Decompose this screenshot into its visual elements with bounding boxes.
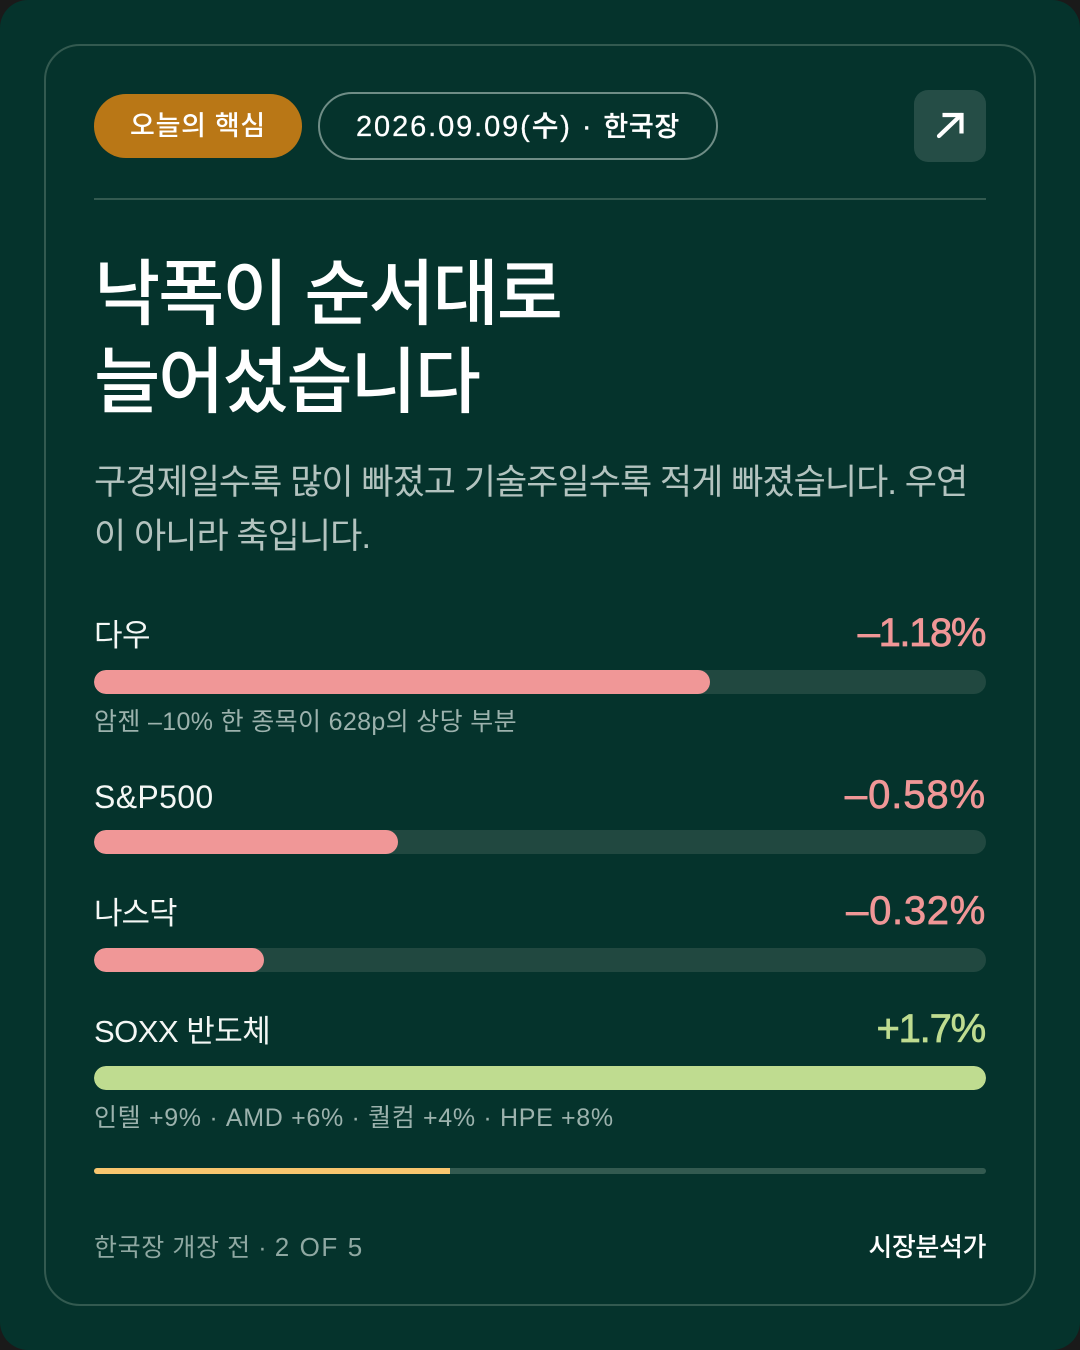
footer left text: 한국장 개장 전 · 2 OF 5 [94, 1232, 364, 1262]
row: Dow label: 다우 [94, 618, 150, 653]
title: 낙폭이 순서대로 [94, 255, 561, 335]
progress bar [94, 1168, 986, 1174]
date pill: 2026.09.09(수) · 한국장 [356, 111, 680, 143]
subtitle: 구경제일수록 많이 빠졌고 기술주일수록 적게 빠졌습니다. 우연 [94, 463, 967, 502]
row: Nasdaq value: –0.32% [846, 889, 986, 933]
row: Dow value: –1.18% [858, 611, 985, 655]
subtitle: 이 아니라 축입니다. [94, 517, 370, 556]
row: Dow note: 암젠 –10% 한 종목이 628p의 상당 부분 [94, 708, 517, 736]
row: S&P500 label: S&P500 [94, 779, 214, 815]
badge: today's key point: 오늘의 핵심 [130, 111, 266, 141]
row: S&P500 value: –0.58% [845, 773, 986, 817]
subtitle [94, 463, 967, 556]
date pill [318, 92, 718, 160]
row: SOXX value: +1.7% [876, 1007, 985, 1051]
row: S&P500 bar [94, 830, 986, 854]
icon: arrow button [914, 90, 986, 162]
row: Dow bar [94, 670, 986, 694]
row: Nasdaq label: 나스닥 [94, 896, 177, 931]
row: SOXX note: 인텔 +9% · AMD +6% · 퀄컴 +4% · HPE +8% [94, 1104, 614, 1132]
row: SOXX label: SOXX 반도체 [94, 1014, 270, 1049]
row: SOXX bar [94, 1066, 986, 1090]
footer right text: 시장분석가 [868, 1232, 986, 1262]
title: 늘어섰습니다 [94, 343, 479, 423]
title [94, 255, 561, 423]
row: Nasdaq bar [94, 948, 986, 972]
header divider [94, 198, 986, 200]
badge: today's key point [94, 94, 302, 158]
